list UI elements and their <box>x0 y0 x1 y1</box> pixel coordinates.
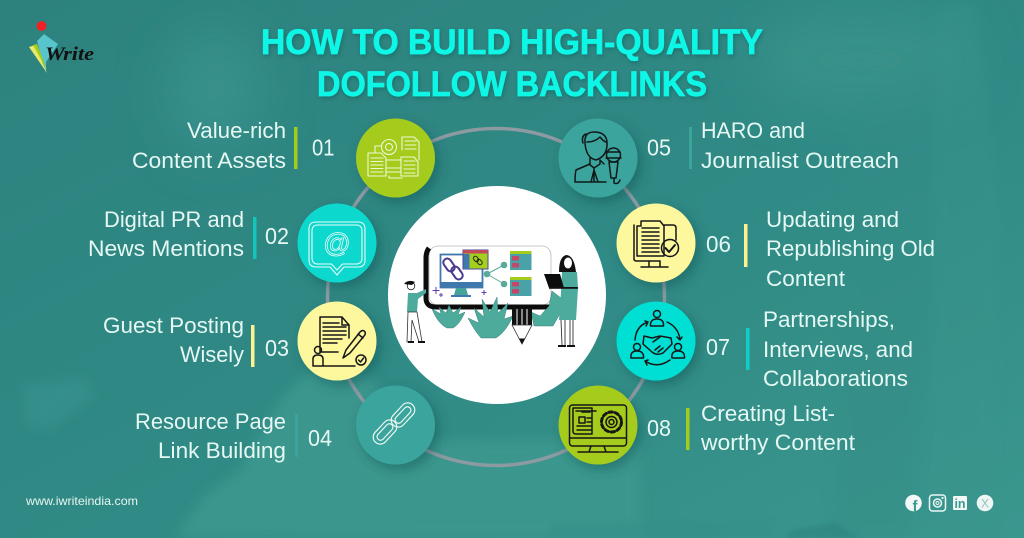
item 01: label: 01 <box>312 134 334 160</box>
item 01: circle and icon <box>356 118 435 198</box>
item 02: label: Digital PR and <box>104 207 244 232</box>
item 07: circle and icon <box>616 302 696 380</box>
illustration: web cards <box>510 251 532 296</box>
illustration: plants <box>432 291 561 338</box>
icon: computer, document and check <box>634 221 678 267</box>
item 01: label: Content Assets <box>132 148 286 173</box>
item 01: label <box>132 118 334 173</box>
illustration: monitor frame <box>426 246 551 307</box>
title: HOW TO BUILD HIGH-QUALITY <box>261 23 763 62</box>
item 03: label: 03 <box>265 335 289 361</box>
icon: at-sign speech bubble: @ <box>323 228 351 258</box>
logo <box>29 21 95 73</box>
item 07: label: Interviews, and <box>763 337 913 362</box>
illustration: pencil <box>512 308 532 344</box>
illustration: computer with chain <box>440 254 483 297</box>
illustration: person at left <box>404 281 426 342</box>
central white circle with illustration <box>388 186 606 404</box>
item 02: circle and icon <box>298 204 376 282</box>
item 05: label <box>647 118 899 173</box>
item 08: label: worthy Content <box>700 430 856 455</box>
icon: monitor with page and gear <box>570 405 626 452</box>
item 06: label: Updating and <box>766 207 899 232</box>
item 08: label <box>647 401 856 455</box>
icon: x: X <box>981 496 989 510</box>
item 04: label: 04 <box>308 425 332 451</box>
item 04: circle and icon <box>356 386 435 464</box>
illustration: woman with laptop <box>544 255 578 346</box>
title <box>261 23 763 104</box>
item 08: label: 08 <box>647 415 671 441</box>
item 02: label: News Mentions <box>88 236 244 261</box>
item 04: label: Resource Page <box>135 409 286 434</box>
icon: chain link <box>370 400 418 447</box>
item 07: label: Collaborations <box>763 366 908 391</box>
logo: Write <box>45 44 95 65</box>
icon: document, pen and person <box>313 317 366 366</box>
item 02: label: 02 <box>265 223 289 249</box>
item 06: circle and icon <box>616 204 696 282</box>
icon: instagram <box>930 495 946 511</box>
item 06: label: Republishing Old <box>766 236 935 261</box>
item 06: label: Content <box>766 266 846 291</box>
item 05: label: 05 <box>647 134 671 160</box>
icon: journalist with microphone <box>575 132 621 184</box>
item 05: label: Journalist Outreach <box>701 148 899 173</box>
item 05: label: HARO and <box>701 118 805 143</box>
illustration: link nodes <box>484 262 507 287</box>
item 03: label: Guest Posting <box>103 313 244 338</box>
item 08: circle and icon <box>558 386 638 464</box>
illustration: browser window <box>463 250 488 269</box>
item 04: label <box>135 409 332 463</box>
item 05: circle and icon <box>558 118 638 198</box>
icon: linkedin: in <box>954 497 966 511</box>
item 08: label: Creating List- <box>701 401 835 426</box>
illustration: sparkles <box>432 287 486 297</box>
icon: facebook: f <box>912 498 918 515</box>
item 01: label: Value-rich <box>187 118 286 143</box>
item 03: label <box>103 313 289 367</box>
item 02: label <box>88 207 289 261</box>
item 07: label: Partnerships, <box>763 307 895 332</box>
item 04: label: Link Building <box>158 438 286 463</box>
item 06: label <box>706 207 935 291</box>
connecting ring <box>328 128 664 466</box>
icon: handshake and people cycle <box>631 310 685 365</box>
item 07: label <box>706 307 913 391</box>
social icons <box>905 495 993 515</box>
item 06: label: 06 <box>706 231 731 257</box>
icon: content documents and gear <box>368 137 419 178</box>
item 07: label: 07 <box>706 334 730 360</box>
website url: www.iwriteindia.com <box>25 494 138 508</box>
item 03: label: Wisely <box>180 342 245 367</box>
item 03: circle and icon <box>298 302 376 380</box>
title: DOFOLLOW BACKLINKS <box>317 65 707 104</box>
